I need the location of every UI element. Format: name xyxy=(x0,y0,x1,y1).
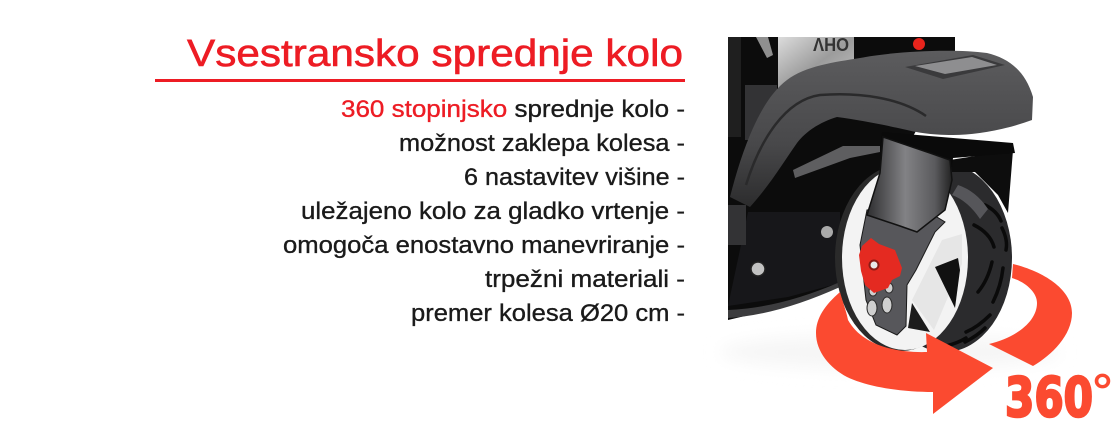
engine bracket grey xyxy=(745,85,777,140)
engine handle xyxy=(756,37,773,58)
silver strut xyxy=(793,146,880,178)
360 degree label: ° xyxy=(1092,364,1113,420)
feature: wheel diameter: premer kolesa Ø20 cm - xyxy=(411,300,685,327)
side bolt xyxy=(821,226,833,238)
title underline xyxy=(155,79,685,82)
fender top pad xyxy=(905,55,1005,79)
360 rotation arrow: rear segment xyxy=(989,264,1072,366)
ground shadow xyxy=(720,334,1060,370)
red engine button xyxy=(913,38,925,50)
body highlights xyxy=(728,282,840,318)
embossed engine mark: OHV xyxy=(813,34,849,54)
feature: bearing: uležajeno kolo za gladko vrtenje - xyxy=(301,198,685,225)
knob shadow xyxy=(890,241,919,291)
feature: height settings: 6 nastavitev višine - xyxy=(464,164,685,191)
rim face xyxy=(842,166,968,350)
360 degree label: 360 xyxy=(1005,366,1093,429)
title: Vsestransko sprednje kolo xyxy=(187,33,683,75)
360 rotation arrow: front segment xyxy=(816,292,993,414)
silver engine block xyxy=(778,37,854,93)
fork mudguard bracket top xyxy=(880,132,1015,167)
lower body panel xyxy=(728,212,840,306)
fork adjustment holes xyxy=(867,283,893,316)
product illustration: front wheel xyxy=(720,34,1113,429)
knob centre xyxy=(870,260,878,270)
feature: manoeuvring: omogoča enostavno manevriranje - xyxy=(283,232,685,259)
upper tyre highlight xyxy=(952,185,988,219)
feature: wheel lock: možnost zaklepa kolesa - xyxy=(399,130,685,157)
lower rim opening xyxy=(908,303,930,332)
side column xyxy=(728,205,746,245)
rim spoke shading xyxy=(912,234,962,330)
fork lower plate xyxy=(860,205,945,335)
body bolt xyxy=(751,262,765,276)
engine fins xyxy=(728,37,741,137)
fender xyxy=(730,51,1033,207)
rear tyre xyxy=(878,164,1012,352)
feature: grip materials: trpežni materiali - xyxy=(485,266,685,293)
feature: 360 degree wheel: 360 stopinjsko sprednje kolo - xyxy=(341,96,685,123)
white rim edge xyxy=(835,165,967,351)
feature list xyxy=(283,96,685,327)
machine body xyxy=(728,37,955,320)
red locking knob xyxy=(859,238,902,293)
fender pad surface xyxy=(915,57,997,74)
rim spokes opening xyxy=(935,258,960,308)
mudguard strut and tyre cover xyxy=(950,150,1013,213)
fender moulding line xyxy=(746,94,926,185)
fork bracket xyxy=(867,137,952,232)
tyre treads xyxy=(946,205,1006,346)
